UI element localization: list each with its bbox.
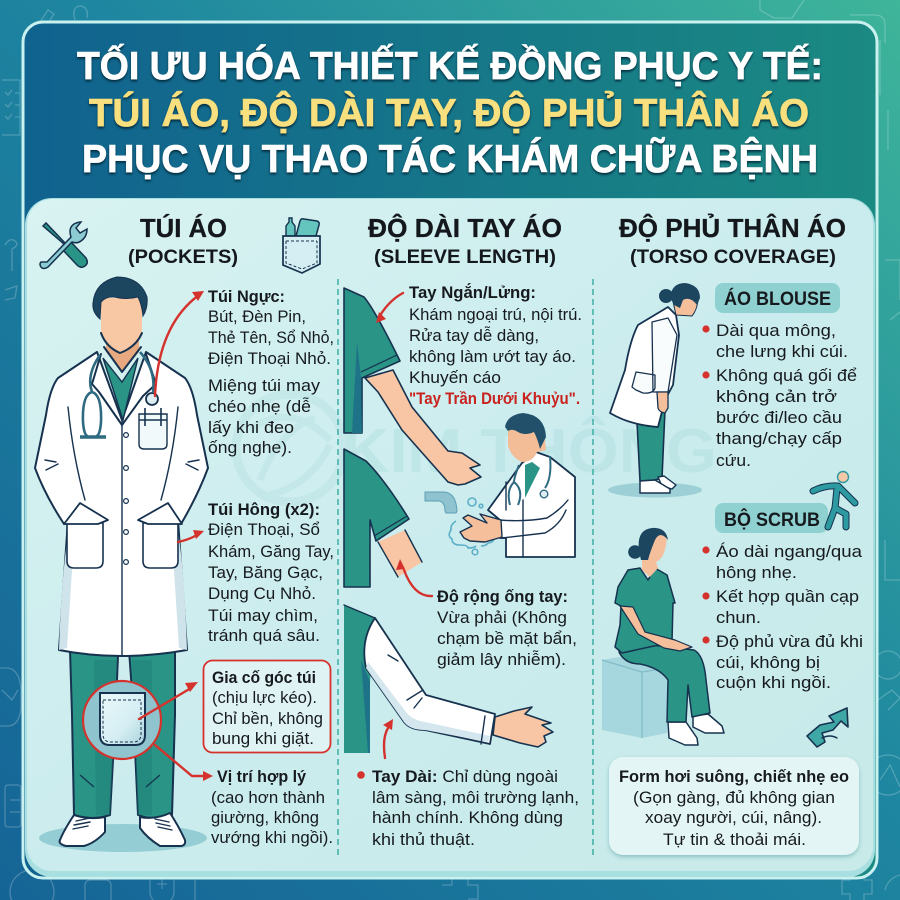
arrow: sleeve width xyxy=(396,559,432,596)
illustration: long sleeve arm xyxy=(344,605,553,753)
illustration: sleeve width xyxy=(344,449,422,587)
text: short sleeve: không làm ướt tay áo. xyxy=(409,347,576,366)
scrub xyxy=(525,462,540,498)
text: long sleeve: khi thủ thuật. xyxy=(372,830,475,849)
text: hip pocket: Tay, Băng Gạc, xyxy=(208,563,323,582)
head xyxy=(508,428,546,462)
text: scrub bullets: chun. xyxy=(716,608,761,627)
text: blouse bullets: bước đi/leo cầu xyxy=(716,408,842,427)
callout: fit advice: Tự tin & thoải mái. xyxy=(663,830,806,849)
text: breast pocket: Bút, Đèn Pin, xyxy=(208,307,306,326)
arrow: pocket reinforcement xyxy=(139,682,198,719)
text: pocket position: Vị trí hợp lý xyxy=(217,767,307,786)
text: blouse bullets: che lưng khi cúi. xyxy=(716,342,848,361)
text: blouse bullets: thang/chạy cấp xyxy=(716,429,842,448)
heading: torso coverage: (TORSO COVERAGE) xyxy=(630,246,836,268)
text: blouse bullets: không cản trở xyxy=(716,387,837,406)
text: breast pocket: Điện Thoại Nhỏ. xyxy=(208,349,331,368)
text: short sleeve: Khám ngoại trú, nội trú. xyxy=(409,305,582,324)
breast pocket xyxy=(139,408,167,449)
title: TÚI ÁO, ĐỘ DÀI TAY, ĐỘ PHỦ THÂN ÁO xyxy=(89,90,809,135)
heading: sleeve length: ĐỘ DÀI TAY ÁO xyxy=(368,213,562,243)
text: short sleeve: Khuyến cáo xyxy=(409,368,501,387)
hands xyxy=(460,514,502,542)
callout: pocket reinforcement: (chịu lực kéo). xyxy=(212,688,317,707)
text: hip pocket: Túi Hông (x2): xyxy=(208,500,320,519)
callout: fit advice xyxy=(609,757,859,855)
heading: torso coverage xyxy=(619,212,846,268)
text: pocket position: vướng khi ngồi). xyxy=(211,828,333,847)
faucet xyxy=(425,492,457,513)
text: breast pocket: ống nghe). xyxy=(208,438,292,457)
illustration: doctor washing hands xyxy=(425,413,575,557)
text: hip pocket: Điện Thoại, Sổ xyxy=(208,520,320,539)
head xyxy=(642,532,667,577)
text: sleeve width: Độ rộng ống tay: xyxy=(437,587,568,606)
text: pocket position xyxy=(211,767,333,847)
illustration: woman bending in blouse xyxy=(608,283,702,498)
text: short sleeve: Tay Ngắn/Lửng: xyxy=(409,283,536,302)
title: PHỤC VỤ THAO TÁC KHÁM CHỮA BỆNH xyxy=(82,137,818,181)
icon: flexible arrow xyxy=(807,708,848,747)
callout: pocket reinforcement: bung khi giặt. xyxy=(212,729,314,748)
heading: sleeve length: (SLEEVE LENGTH) xyxy=(374,246,556,268)
stool xyxy=(602,656,667,738)
text: blouse bullets: cứu. xyxy=(716,451,751,470)
illustration: short sleeve arm xyxy=(344,288,481,485)
text: hip pocket: Dụng Cụ Nhỏ. xyxy=(208,584,316,603)
text: short sleeve xyxy=(409,283,582,408)
text: scrub bullets: cuộn khi ngồi. xyxy=(716,673,831,692)
title xyxy=(77,43,823,181)
head xyxy=(93,277,147,372)
text: breast pocket: Thẻ Tên, Sổ Nhỏ, xyxy=(208,328,334,347)
text: sleeve width: giảm lây nhiễm). xyxy=(437,650,566,669)
arrow: hip pocket xyxy=(178,530,204,542)
arrow: pocket position xyxy=(155,745,213,781)
text: scrub bullets: Áo dài ngang/qua xyxy=(716,542,863,561)
coat xyxy=(488,452,575,557)
text: blouse bullets xyxy=(702,321,857,470)
floor shadow xyxy=(39,824,207,852)
text: pocket position: giường, không xyxy=(211,808,319,827)
text: breast pocket: chéo nhẹ (dễ xyxy=(208,397,311,416)
text: scrub label: BỘ SCRUB xyxy=(724,509,820,531)
stethoscope xyxy=(80,352,158,437)
callout: fit advice: Form hơi suông, chiết nhẹ eo xyxy=(619,767,849,786)
scrub collar xyxy=(103,358,138,420)
coat buttons xyxy=(124,433,128,564)
text: long sleeve: hành chính. Không dùng xyxy=(372,808,563,827)
text: blouse bullets: Dài qua mông, xyxy=(716,321,836,340)
text: sleeve width: chạm bề mặt bẩn, xyxy=(437,629,577,648)
shoes xyxy=(60,813,185,846)
illustration: seated woman in scrubs xyxy=(602,528,724,745)
text: scrub bullets: hông nhẹ. xyxy=(716,563,797,582)
text: breast pocket xyxy=(208,287,334,457)
text: scrub bullets xyxy=(702,542,863,692)
content panel xyxy=(25,198,875,877)
text: long sleeve: lâm sàng, môi trường lạnh, xyxy=(372,788,579,807)
text: hip pocket: tránh quá sâu. xyxy=(208,626,320,645)
heading: pockets xyxy=(128,213,238,268)
text: blouse label: ÁO BLOUSE xyxy=(724,288,831,310)
text: scrub bullets: Kết hợp quần cạp xyxy=(716,587,859,606)
callout: fit advice: xoay người, cúi, nâng). xyxy=(645,808,822,827)
text: hip pocket: Túi may chìm, xyxy=(208,606,318,625)
text: sleeve width xyxy=(437,587,577,669)
callout: pocket reinforcement xyxy=(204,660,330,752)
text: long sleeve: Tay Dài: Chỉ dùng ngoài xyxy=(372,767,558,786)
side pockets xyxy=(64,503,182,568)
text: scrub bullets: Độ phủ vừa đủ khi xyxy=(716,632,863,651)
detail circle: pocket corner xyxy=(83,681,161,759)
text: hip pocket xyxy=(208,500,334,645)
text: long sleeve xyxy=(357,767,579,849)
icon: shirt pocket xyxy=(283,218,320,273)
heading: sleeve length xyxy=(368,213,562,268)
lapels xyxy=(92,354,156,425)
callout: pocket reinforcement: Gia cố góc túi xyxy=(212,668,316,687)
arrow: long sleeve xyxy=(383,719,393,758)
lab coat xyxy=(35,352,208,656)
icon: crossed tools xyxy=(40,222,87,268)
illustration: doctor with lab coat xyxy=(35,277,208,852)
text: blouse bullets: Không quá gối để xyxy=(716,366,857,385)
text: pocket position: (cao hơn thành xyxy=(211,788,325,807)
text: breast pocket: Túi Ngực: xyxy=(208,287,285,306)
watermark xyxy=(236,394,717,502)
title: TỐI ƯU HÓA THIẾT KẾ ĐỒNG PHỤC Y TẾ: xyxy=(77,43,823,88)
trousers xyxy=(619,645,710,722)
top xyxy=(615,568,675,653)
arrow: breast pocket xyxy=(155,291,204,396)
text: hip pocket: Khám, Găng Tay, xyxy=(208,542,334,561)
text: breast pocket: lấy khi đeo xyxy=(208,418,294,437)
heading: pockets: (POCKETS) xyxy=(128,246,238,268)
shoes xyxy=(668,714,724,745)
heading: pockets: TÚI ÁO xyxy=(140,213,227,243)
text: sleeve width: Vừa phải (Không xyxy=(437,608,567,627)
arm xyxy=(620,606,692,651)
text: breast pocket: Miệng túi may xyxy=(208,376,321,395)
text: scrub bullets: cúi, không bị xyxy=(716,653,820,672)
text: short sleeve: Rửa tay dễ dàng, xyxy=(409,326,539,345)
arrow: short sleeve xyxy=(376,293,403,323)
callout: pocket reinforcement: Chỉ bền, không xyxy=(212,709,323,728)
icon: running figure xyxy=(813,472,855,527)
text: short sleeve: "Tay Trần Dưới Khuỷu". xyxy=(409,389,580,408)
trousers xyxy=(70,650,175,818)
text: blouse label xyxy=(715,283,840,313)
stethoscope xyxy=(509,456,550,505)
soap foam xyxy=(449,498,493,555)
text: scrub label xyxy=(715,503,828,533)
column dividers xyxy=(338,279,593,856)
watermark: KIM THÔNG xyxy=(342,417,717,486)
callout: fit advice: (Gọn gàng, đủ không gian xyxy=(633,788,835,807)
heading: torso coverage: ĐỘ PHỦ THÂN ÁO xyxy=(619,212,846,243)
